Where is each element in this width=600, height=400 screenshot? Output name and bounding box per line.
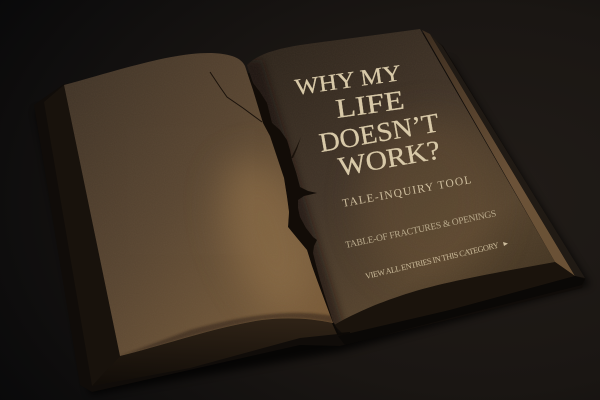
book shadow — [36, 60, 590, 395]
page fill — [60, 50, 335, 360]
bottom curl shade — [120, 313, 333, 356]
left page hairline crack — [210, 72, 262, 122]
gutter shade — [240, 60, 345, 330]
right page stack — [334, 262, 575, 336]
right cover bottom edge — [338, 276, 585, 345]
page light — [366, 120, 484, 260]
subtitle: TALE-INQUIRY TOOL — [341, 174, 472, 210]
page fill — [240, 25, 560, 330]
right page — [240, 25, 560, 330]
page glow — [214, 154, 316, 304]
title — [293, 60, 442, 182]
link: VIEW ALL ENTRIES IN THIS CATEGORY — [364, 241, 500, 281]
title line: life: LIFE — [334, 85, 406, 124]
section label: TABLE-OF FRACTURES & OPENINGS — [345, 209, 497, 251]
page grain — [60, 50, 335, 360]
right fore-edge — [422, 30, 575, 276]
left page — [60, 50, 335, 360]
title line: doesn't: DOESN’T — [317, 107, 442, 158]
left page stack side — [44, 85, 120, 386]
left page stack bottom — [92, 318, 338, 386]
page grain — [240, 25, 560, 330]
title line: work?: WORK? — [336, 134, 442, 182]
tear gap — [247, 70, 333, 322]
spine fold — [333, 323, 350, 334]
right cover edge — [430, 34, 585, 278]
small crack right page — [291, 137, 301, 158]
title line: why my: WHY MY — [293, 60, 403, 100]
icon: arrow — [503, 242, 508, 246]
